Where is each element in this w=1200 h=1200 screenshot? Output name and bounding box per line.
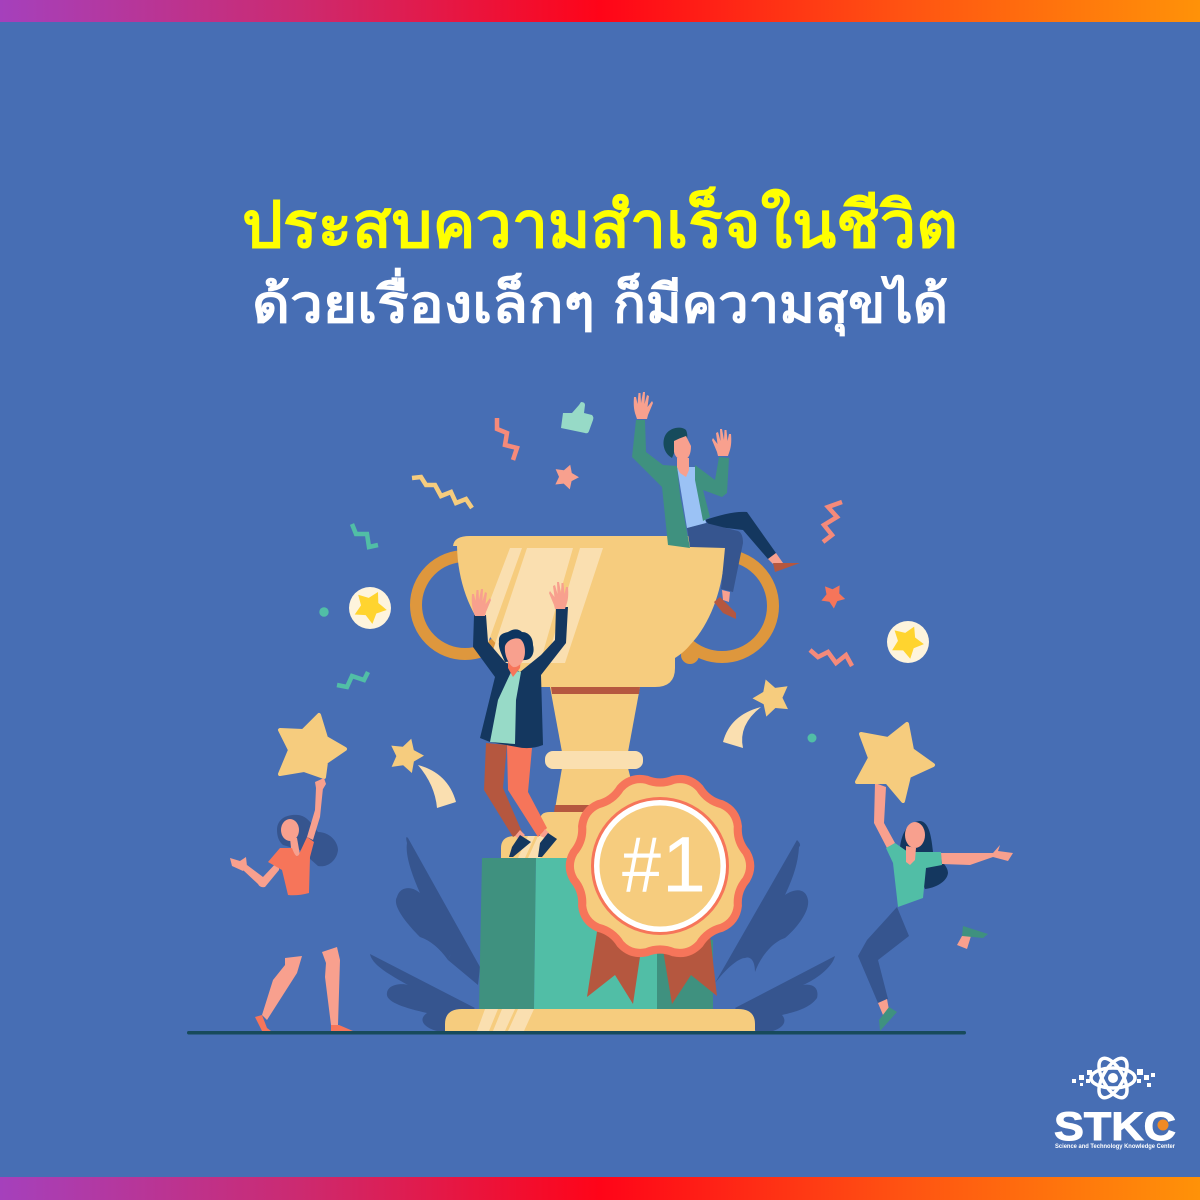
right hand	[549, 582, 568, 609]
right background leaves	[715, 840, 835, 1031]
logo: STKC	[1054, 1054, 1176, 1150]
raised arm	[307, 788, 323, 840]
atom core	[1108, 1073, 1118, 1083]
chin hand	[906, 846, 916, 865]
head	[505, 638, 525, 667]
star	[748, 674, 795, 719]
face	[281, 819, 299, 841]
medal white ring	[594, 800, 726, 932]
right ribbon	[663, 935, 717, 1004]
green zigzag upper	[352, 524, 378, 547]
front foot	[722, 590, 730, 602]
base shine	[477, 1009, 534, 1031]
back leg	[705, 512, 776, 559]
standing shoe	[879, 1007, 897, 1031]
hair	[499, 629, 534, 662]
raised arm	[874, 783, 895, 848]
logo pixels	[1072, 1069, 1155, 1087]
sitting man on trophy	[632, 392, 800, 619]
trophy base	[445, 1009, 755, 1031]
shooting star right	[723, 674, 795, 748]
title line 1: ประสบความสำเร็จในชีวิต	[242, 187, 958, 261]
hand on star	[315, 778, 326, 789]
left leg	[262, 956, 302, 1020]
trophy handle right	[671, 555, 773, 657]
badge disc	[349, 587, 391, 629]
neck	[290, 838, 300, 858]
ankles	[515, 829, 549, 840]
held star	[280, 715, 345, 777]
held star	[857, 724, 933, 801]
badge star	[349, 584, 392, 627]
hair	[277, 815, 338, 866]
logo tagline: Science and Technology Knowledge Center	[1055, 1144, 1176, 1150]
shirt	[886, 843, 942, 907]
icon: left star badge	[349, 584, 392, 629]
medal coral ring	[591, 797, 729, 935]
shirt	[677, 467, 706, 528]
logo atom	[1091, 1054, 1135, 1102]
lower plinth	[501, 836, 620, 858]
tail	[723, 707, 761, 748]
back shoe	[773, 563, 800, 572]
green zigzag lower	[337, 672, 368, 687]
left leg	[484, 743, 522, 837]
left ribbon	[587, 925, 641, 1004]
icon: thumbs up	[561, 402, 593, 433]
face	[905, 822, 925, 848]
kicked shoe	[962, 926, 988, 938]
bottom gradient bar	[0, 1177, 1200, 1200]
green dot left	[319, 607, 329, 617]
hair	[664, 428, 687, 458]
shirt	[268, 837, 314, 895]
green dot right	[808, 734, 816, 742]
left hand	[634, 392, 653, 419]
stem band lower	[554, 805, 640, 813]
left shoe	[509, 835, 531, 857]
left shoe	[255, 1015, 271, 1031]
trophy	[416, 536, 773, 858]
icon: coral star	[818, 579, 850, 611]
confetti	[337, 418, 852, 687]
left arm	[243, 860, 279, 887]
title line 2: ก็มีความสุขได้	[613, 273, 948, 337]
medal rosette	[570, 779, 750, 953]
left background leaves	[370, 837, 480, 1031]
yellow zigzag	[412, 477, 472, 508]
title	[242, 187, 958, 337]
top gradient bar	[0, 0, 1200, 22]
standing foot	[878, 999, 889, 1015]
stem band upper	[551, 687, 640, 694]
right leg	[507, 745, 547, 837]
badge disc	[887, 621, 929, 663]
collar	[545, 751, 643, 769]
front leg	[687, 523, 743, 592]
pink zigzag right lower	[810, 650, 852, 666]
bowl shine	[478, 548, 603, 663]
neck	[677, 458, 689, 477]
jacket	[632, 420, 729, 548]
pedestal shade	[657, 940, 713, 1010]
logo wordmark: STKC	[1054, 1105, 1176, 1149]
pants	[858, 907, 909, 1003]
ground line	[187, 1031, 966, 1034]
left hand	[472, 589, 491, 616]
icon: salmon star	[551, 461, 582, 491]
pedestal dark face	[479, 858, 536, 1010]
pink zigzag top	[497, 418, 517, 460]
left woman with star	[230, 715, 353, 1031]
stem upper	[550, 687, 640, 752]
pedestal light face	[534, 858, 657, 1010]
medal	[570, 779, 750, 1004]
trophy bowl	[453, 536, 735, 687]
badge star	[887, 620, 929, 661]
left hand	[230, 857, 247, 871]
shirt	[490, 670, 521, 744]
base slab	[445, 1009, 755, 1031]
jacket	[473, 607, 568, 748]
tail	[418, 765, 456, 808]
green pedestal	[479, 858, 713, 1010]
front shoe	[714, 597, 736, 619]
right woman with star	[857, 724, 1013, 1031]
outstretched arm	[941, 845, 1013, 865]
neck	[508, 658, 521, 677]
right leg	[322, 947, 340, 1025]
trophy handle left	[416, 556, 514, 654]
shooting star left	[385, 734, 456, 808]
handle right joint	[681, 646, 699, 664]
medal number: 1	[662, 820, 706, 908]
icon: right star badge	[887, 620, 929, 663]
cheering man in front	[472, 582, 568, 857]
right hand	[712, 429, 731, 456]
logo dot	[1158, 1120, 1168, 1130]
star	[385, 734, 428, 775]
medal centre	[600, 806, 720, 926]
title line 2: ด้วยเรื่องเล็กๆ	[252, 268, 595, 334]
kicked foot	[957, 936, 971, 949]
medal number: #	[622, 820, 661, 908]
head	[674, 436, 691, 460]
right shoe	[538, 833, 557, 857]
hair	[900, 821, 948, 889]
upper plinth	[540, 812, 640, 858]
pink zigzag right upper	[823, 502, 842, 542]
right shoe	[331, 1025, 353, 1031]
back foot	[768, 553, 783, 564]
plinth shine	[518, 836, 550, 858]
stem lower	[554, 768, 640, 815]
